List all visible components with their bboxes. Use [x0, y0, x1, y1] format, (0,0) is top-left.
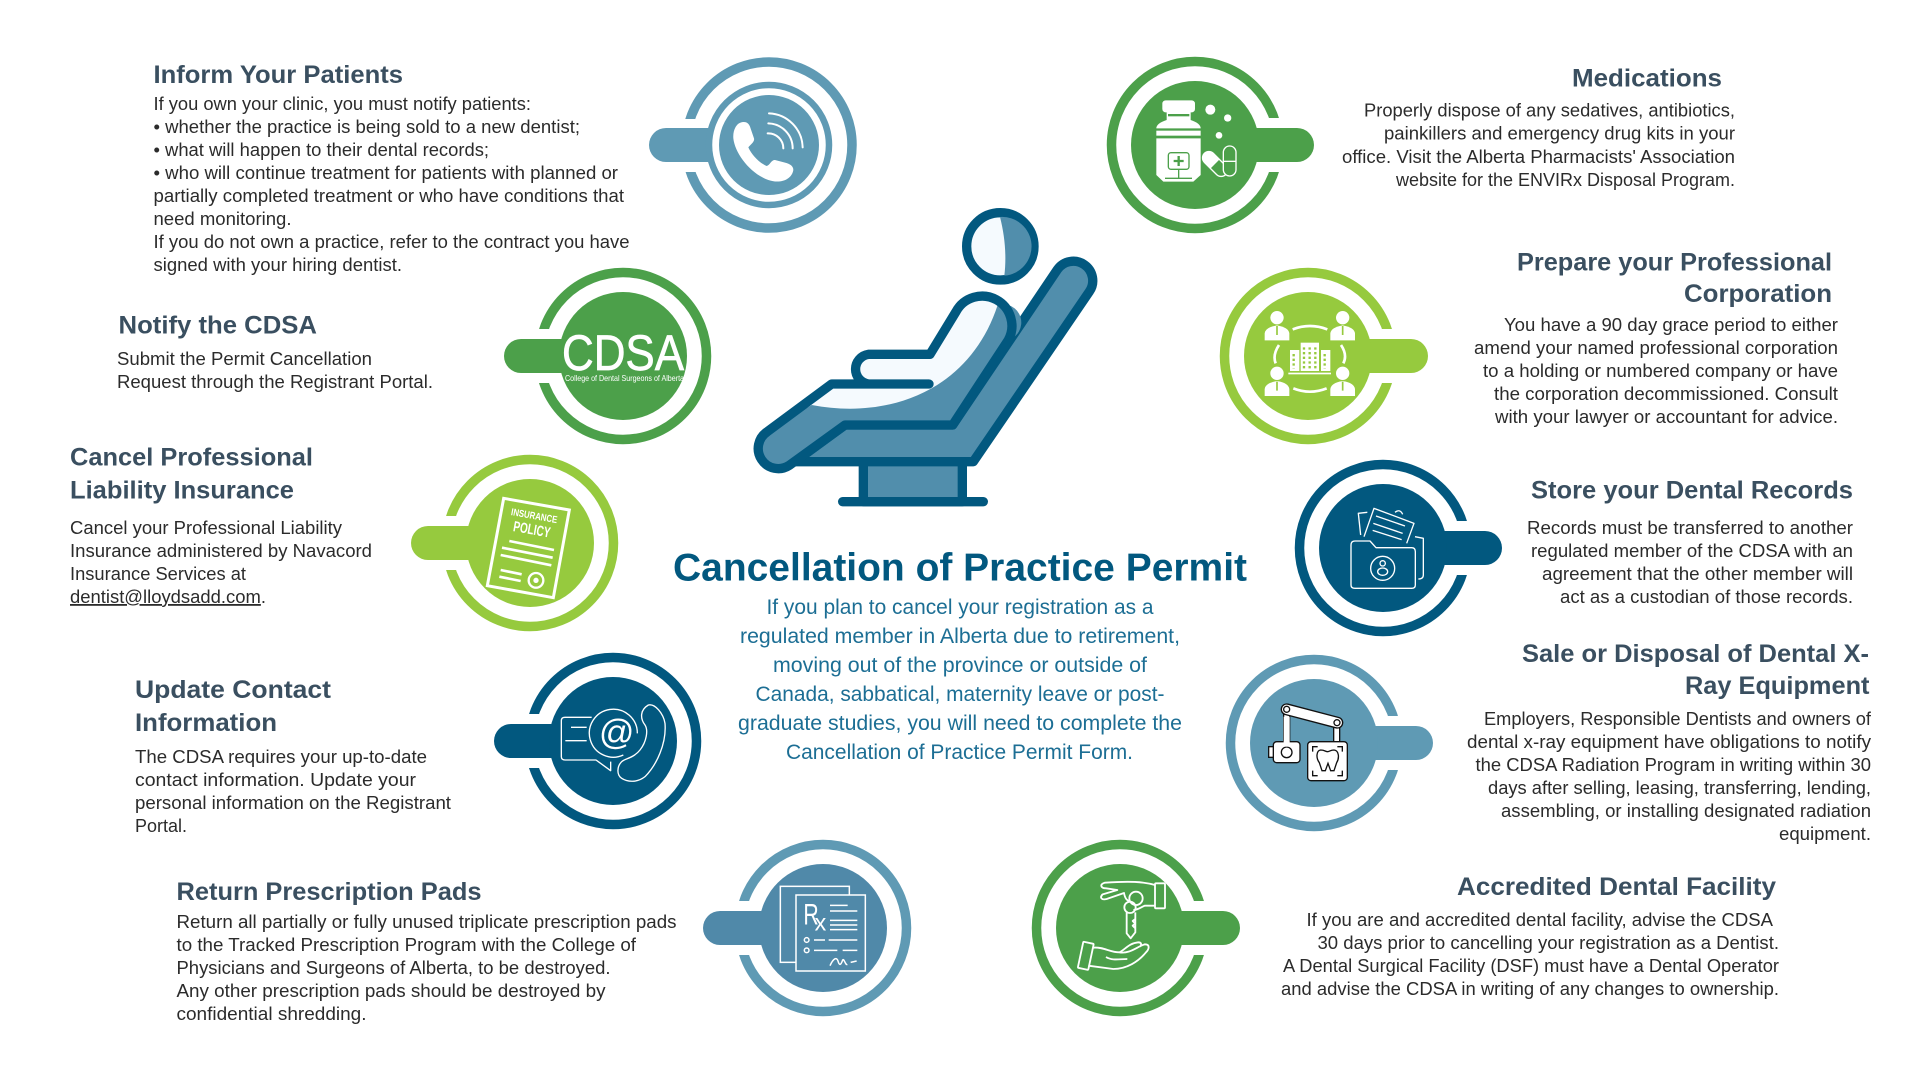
text block: cancel insurance: Insurance administered by Navacord — [70, 541, 372, 561]
text block: accredited dental facility: If you are and accredited dental facility, advise the CDSA — [1306, 910, 1773, 930]
text block: introduction: If you plan to cancel your registration as a — [766, 596, 1154, 619]
icon: CDSA logo — [504, 272, 706, 440]
text block: medications: Properly dispose of any sedatives, antibiotics, — [1364, 100, 1735, 120]
heading: update contact information: Information — [135, 709, 277, 737]
text block: professional corporation — [1474, 315, 1838, 427]
text block: x-ray equipment: the CDSA Radiation Program in writing within 30 — [1476, 755, 1871, 775]
text block: accredited dental facility — [1281, 910, 1779, 999]
icon: CDSA logo: CDSA — [562, 325, 685, 381]
text block: return prescription pads: Physicians and Surgeons of Alberta, to be destroyed. — [176, 958, 610, 978]
text block: inform your patients — [154, 94, 630, 275]
heading: update contact information — [135, 676, 332, 737]
heading: inform your patients: Inform Your Patients — [154, 61, 403, 89]
icon: prescription pad documents: x — [815, 910, 827, 936]
text block: inform your patients: • what will happen to their dental records; — [154, 140, 489, 160]
panel: inform your patients — [154, 61, 630, 275]
text block: update contact: Portal. — [135, 816, 187, 836]
text block: inform your patients: need monitoring. — [154, 209, 292, 229]
text block: cancel insurance: Cancel your Professional Liability — [70, 518, 342, 538]
text block: professional corporation: You have a 90 day grace period to either — [1504, 315, 1838, 335]
icon: prescription pad documents — [703, 844, 906, 1012]
panel: return prescription pads — [176, 878, 676, 1024]
icon: professionals around corporate building — [1224, 272, 1428, 440]
text block: return prescription pads: to the Tracked Prescription Program with the College of — [176, 935, 637, 955]
panel: prepare your professional corporation — [1474, 248, 1838, 427]
text block: introduction: Cancellation of Practice Permit Form. — [786, 741, 1133, 764]
icon: folder of dental records — [1300, 464, 1502, 632]
text block: professional corporation: to a holding or numbered company or have — [1483, 361, 1838, 381]
text block: introduction — [738, 596, 1182, 764]
text block: inform your patients: • who will continue treatment for patients with planned or — [154, 163, 618, 183]
icon: contact email and phone — [494, 658, 696, 824]
text block: dental records: act as a custodian of those records. — [1560, 587, 1853, 607]
icon: x-ray machine and tooth — [1230, 660, 1433, 826]
text block: dental records — [1527, 518, 1853, 607]
text block: medications: painkillers and emergency drug kits in your — [1384, 124, 1735, 144]
heading: sale or disposal of x-ray equipment — [1522, 640, 1870, 700]
text block: accredited dental facility: 30 days prior to cancelling your registration as a Dentist. — [1318, 933, 1779, 953]
text block: introduction: moving out of the province or outside of — [773, 654, 1147, 677]
icon: insurance policy document — [411, 460, 614, 626]
text block: medications: office. Visit the Alberta Pharmacists' Association — [1342, 147, 1735, 167]
text block: notify the CDSA: Submit the Permit Cancellation — [117, 349, 372, 369]
text block: inform your patients: • whether the practice is being sold to a new dentist; — [154, 117, 580, 137]
text block: x-ray equipment: Employers, Responsible Dentists and owners of — [1484, 709, 1872, 729]
text block: update contact — [135, 747, 451, 836]
heading: prepare your professional corporation: Prepare your Professional — [1517, 248, 1832, 276]
text block: professional corporation: amend your named professional corporation — [1474, 338, 1838, 358]
text block: update contact: The CDSA requires your up-to-date — [135, 747, 427, 767]
text block: professional corporation: the corporation decommissioned. Consult — [1494, 384, 1838, 404]
text block: notify the CDSA — [117, 349, 433, 392]
icon: CDSA logo: College of Dental Surgeons of Alberta — [565, 373, 684, 383]
title: Cancellation of Practice Permit — [673, 546, 1247, 590]
heading: sale or disposal of x-ray equipment: Sale or Disposal of Dental X- — [1522, 640, 1869, 668]
text block: dental records: regulated member of the CDSA with an — [1531, 541, 1853, 561]
text block: medications — [1342, 100, 1735, 190]
text block: return prescription pads: Any other prescription pads should be destroyed by — [176, 981, 606, 1001]
panel: update contact information — [135, 676, 451, 836]
text block: accredited dental facility: A Dental Surgical Facility (DSF) must have a Dental Operator — [1283, 956, 1779, 976]
text block: accredited dental facility: and advise the CDSA in writing of any changes to ownership. — [1281, 979, 1779, 999]
text block: cancel insurance: Insurance Services at — [70, 564, 246, 584]
heading: medications: Medications — [1572, 64, 1722, 92]
heading: cancel professional liability insurance — [70, 444, 313, 504]
panel: cancel professional liability insurance — [70, 444, 372, 607]
icon: prescription pad documents: R — [803, 898, 819, 931]
heading: return prescription pads: Return Prescription Pads — [176, 878, 482, 906]
text block: update contact: contact information. Update your — [135, 770, 416, 790]
heading: cancel professional liability insurance: Liability Insurance — [70, 476, 294, 504]
text block: x-ray equipment — [1467, 709, 1872, 844]
panel: sale or disposal of dental x-ray equipment — [1467, 640, 1872, 844]
text block: return prescription pads: confidential shredding. — [176, 1004, 366, 1024]
text block: dental records: Records must be transferred to another — [1527, 518, 1853, 538]
text block: medications: website for the ENVIRx Disposal Program. — [1395, 170, 1735, 190]
panel: medications — [1342, 64, 1735, 190]
text block: dental records: agreement that the other member will — [1542, 564, 1853, 584]
text block: x-ray equipment: dental x-ray equipment have obligations to notify — [1467, 732, 1871, 752]
heading: sale or disposal of x-ray equipment: Ray Equipment — [1685, 672, 1870, 700]
text block: professional corporation: with your lawyer or accountant for advice. — [1494, 407, 1838, 427]
heading: update contact information: Update Contact — [135, 676, 332, 704]
text block: inform your patients: If you own your clinic, you must notify patients: — [154, 94, 531, 114]
icon: insurance policy document: INSURANCE — [510, 507, 558, 526]
text block: introduction: regulated member in Alberta due to retirement, — [740, 625, 1180, 648]
panel: notify the CDSA — [117, 312, 433, 392]
text block: return prescription pads: Return all partially or fully unused triplicate prescription pads — [176, 912, 676, 932]
heading: prepare your professional corporation: Corporation — [1684, 280, 1832, 308]
text block: cancel insurance: dentist@lloydsadd.com. — [70, 587, 266, 607]
heading: store your dental records: Store your Dental Records — [1531, 476, 1853, 504]
panel: store your dental records — [1527, 476, 1853, 607]
panel: accredited dental facility — [1281, 873, 1779, 999]
text block: inform your patients: signed with your hiring dentist. — [154, 255, 402, 275]
text block: x-ray equipment: assembling, or installing designated radiation — [1501, 801, 1871, 821]
text block: x-ray equipment: equipment. — [1779, 824, 1871, 844]
heading: prepare your professional corporation — [1517, 248, 1832, 308]
illustration: patient reclining in dental chair — [758, 213, 1093, 502]
icon: hand passing keys to open hand — [1036, 844, 1240, 1012]
text block: cancel insurance — [70, 518, 372, 607]
text block: x-ray equipment: days after selling, leasing, transferring, lending, — [1488, 778, 1871, 798]
text block: return prescription pads — [176, 912, 676, 1024]
text block: inform your patients: partially completed treatment or who have conditions that — [154, 186, 624, 206]
icon: medicine bottle and pills — [1112, 62, 1314, 228]
text block: introduction: Canada, sabbatical, maternity leave or post- — [756, 683, 1165, 706]
text block: inform your patients: If you do not own a practice, refer to the contract you have — [154, 232, 630, 252]
icon: telephone with signal waves — [649, 62, 852, 228]
heading: cancel professional liability insurance: Cancel Professional — [70, 444, 313, 472]
text block: update contact: personal information on the Registrant — [135, 793, 451, 813]
icon: insurance policy document: POLICY — [512, 519, 552, 541]
text block: notify the CDSA: Request through the Registrant Portal. — [117, 372, 433, 392]
icon: contact email and phone: @ — [598, 713, 634, 752]
heading: notify the CDSA: Notify the CDSA — [118, 312, 317, 340]
text block: introduction: graduate studies, you will need to complete the — [738, 712, 1182, 735]
heading: accredited dental facility: Accredited Dental Facility — [1457, 873, 1776, 901]
